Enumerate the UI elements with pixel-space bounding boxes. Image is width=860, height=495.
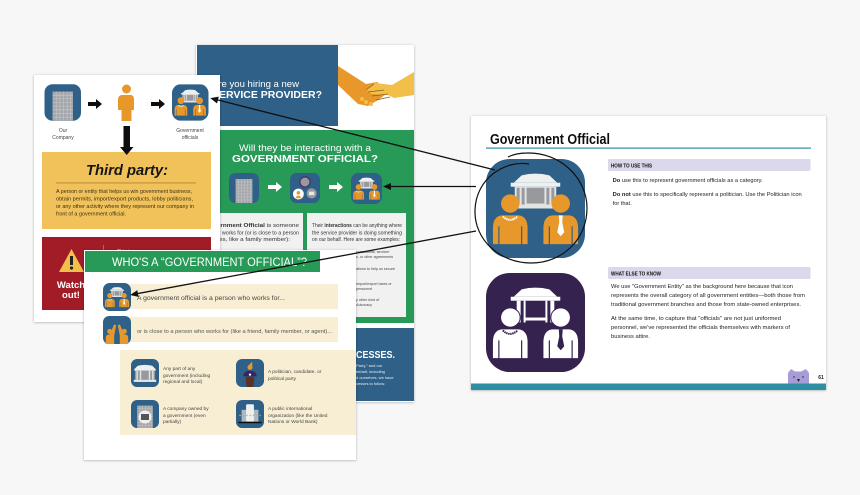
header banner: Are you hiring a new bbox=[212, 79, 299, 90]
footer bar bbox=[471, 384, 826, 390]
panel: green question section: s, or other agreements bbox=[356, 255, 393, 259]
section: how to use this: Do not use this to specifically represent a politician. Use the Politician icon bbox=[613, 192, 802, 198]
panel: green question section: import/export taxes or bbox=[356, 282, 392, 286]
arrow: guide page to service provider poster icon bbox=[390, 186, 476, 188]
icon: purple government official bbox=[486, 273, 585, 372]
panel: third party definition: front of a government official. bbox=[56, 212, 126, 218]
section: what else to know: personnel, we've represented the officials themselves with markers of bbox=[611, 325, 790, 331]
item: politician: A politician, candidate, or bbox=[268, 369, 322, 375]
item: international organization: Nations or World Bank) bbox=[268, 419, 318, 425]
item: international organization bbox=[236, 400, 328, 428]
item: any part of government: government (including bbox=[163, 373, 211, 379]
page title: Government Official bbox=[490, 132, 610, 148]
panel: green question section: ations to help us secure bbox=[356, 267, 395, 271]
panel: green question section: on our behalf. Here are some examples: bbox=[312, 237, 400, 243]
infographic canvas bbox=[32, 44, 828, 462]
icon: color government official bbox=[486, 159, 585, 258]
panel: green question section: Their interactions can be anything where bbox=[312, 223, 402, 229]
row: close to government worker: or is close to a person who works for (like a friend, family member, or agent)... bbox=[137, 329, 332, 335]
item: government owned company: a government (even bbox=[163, 413, 206, 419]
page number: 61 bbox=[818, 375, 824, 381]
row: works for government bbox=[103, 283, 338, 311]
panel: green question section: who is or works for (or is close to a person bbox=[199, 230, 299, 236]
header banner: SERVICE PROVIDER? bbox=[212, 89, 322, 101]
item: government owned company bbox=[131, 400, 209, 428]
panel: green question section: GOVERNMENT OFFICIAL? bbox=[232, 153, 378, 165]
header banner: WHO'S A “GOVERNMENT OFFICIAL”? bbox=[112, 257, 307, 269]
arrow: down to definition bbox=[120, 126, 134, 155]
icon: government officials: officials bbox=[182, 135, 199, 141]
panel: third party definition bbox=[42, 152, 211, 229]
panel: blue processes section bbox=[196, 328, 414, 401]
item: international organization: A public international bbox=[268, 406, 312, 412]
icon: person bbox=[118, 84, 134, 121]
icon: handshake bbox=[338, 66, 414, 106]
panel: watch out warning bbox=[42, 237, 211, 310]
panel: watch out warning: This is a bbox=[117, 249, 136, 255]
panel: blue processes section: d ourselves, we have bbox=[356, 375, 394, 380]
panel: third party definition: A person or entity that helps us win government business, bbox=[56, 189, 192, 195]
row: works for government: A government official is a person who works for... bbox=[137, 295, 285, 302]
panel: watch out warning: out! bbox=[62, 290, 80, 301]
panel: who's a government official poster bbox=[84, 250, 356, 460]
arrow: guide page to who's official poster icon bbox=[137, 231, 476, 294]
section: how to use this: for that. bbox=[613, 201, 632, 207]
section: how to use this: HOW TO USE THIS bbox=[611, 164, 652, 170]
panel: blue processes section: CESSES. bbox=[356, 350, 395, 361]
panel: green question section: Will they be interacting with a bbox=[239, 143, 372, 154]
item: politician bbox=[236, 359, 322, 387]
item: any part of government: regional and local) bbox=[163, 379, 203, 385]
panel: green question section: Advocacy bbox=[356, 303, 372, 307]
item: any part of government bbox=[131, 359, 211, 387]
panel: green question section: consultants, service/ bbox=[356, 250, 390, 254]
section: what else to know: traditional government branches and those from state-owned enterprises. bbox=[611, 302, 801, 308]
section: what else to know: WHAT ELSE TO KNOW bbox=[611, 272, 661, 278]
header banner bbox=[85, 251, 320, 272]
panel: blue processes section: cesses to follow. bbox=[356, 381, 385, 386]
panel: green question section: A Government Official is someone bbox=[199, 223, 299, 229]
item: government owned company: partially) bbox=[163, 419, 182, 425]
icon: our company bbox=[44, 84, 81, 141]
panel: types of officials bbox=[120, 350, 356, 435]
arrow: company to third party bbox=[88, 99, 102, 109]
icon: government officials: Government bbox=[176, 128, 204, 134]
panel: blue processes section: behalf, including bbox=[356, 369, 385, 374]
panel: watch out warning: Watch bbox=[57, 280, 85, 291]
item: any part of government: Any part of any bbox=[163, 366, 196, 372]
arrow: third party to officials bbox=[151, 99, 165, 109]
icon: our company: Our bbox=[59, 128, 67, 134]
panel: green question section: y other kind of bbox=[356, 298, 380, 302]
panel: government official guide page bbox=[471, 116, 826, 390]
section: how to use this bbox=[608, 159, 810, 207]
icon: our company: Company bbox=[52, 135, 74, 141]
section: what else to know: business attire. bbox=[611, 334, 650, 340]
panel: green question section: personnel bbox=[356, 287, 372, 291]
icon: government officials bbox=[172, 84, 208, 141]
section: what else to know: We use "Government Entity" as the background here because that icon bbox=[611, 284, 793, 290]
arrow: guide page to third party poster icon bbox=[217, 100, 495, 170]
panel: blue processes section: Party," and our bbox=[356, 363, 383, 368]
icon: purple cat mascot bbox=[788, 369, 809, 384]
header banner bbox=[197, 45, 338, 126]
panel: green question section: who does, like a family member): bbox=[199, 237, 290, 243]
section: what else to know: At the same time, to capture that "officials" are not just uniformed bbox=[611, 316, 781, 322]
panel: third party poster bbox=[34, 75, 220, 322]
section: what else to know: represents the overall category of all government entities—both those from bbox=[611, 293, 805, 299]
item: politician: political party bbox=[268, 376, 297, 382]
item: international organization: organization (like the United bbox=[268, 413, 328, 419]
panel: third party definition: Third party: bbox=[86, 162, 168, 179]
item: government owned company: A company owned by bbox=[163, 406, 209, 412]
panel: third party definition: or any other activity where they represent our company in bbox=[56, 204, 194, 210]
panel: green question section bbox=[196, 130, 414, 323]
panel: third party definition: obtain permits, import/export products, lobby politicians, bbox=[56, 197, 193, 203]
row: close to government worker bbox=[103, 316, 338, 344]
panel: green question section: the service provider is doing something bbox=[312, 230, 402, 236]
section: what else to know bbox=[608, 267, 810, 340]
hand drawn circle around icon bbox=[475, 153, 587, 263]
panel: service provider poster bbox=[196, 45, 414, 402]
section: how to use this: Do use this to represent government officials as a category. bbox=[613, 178, 763, 184]
